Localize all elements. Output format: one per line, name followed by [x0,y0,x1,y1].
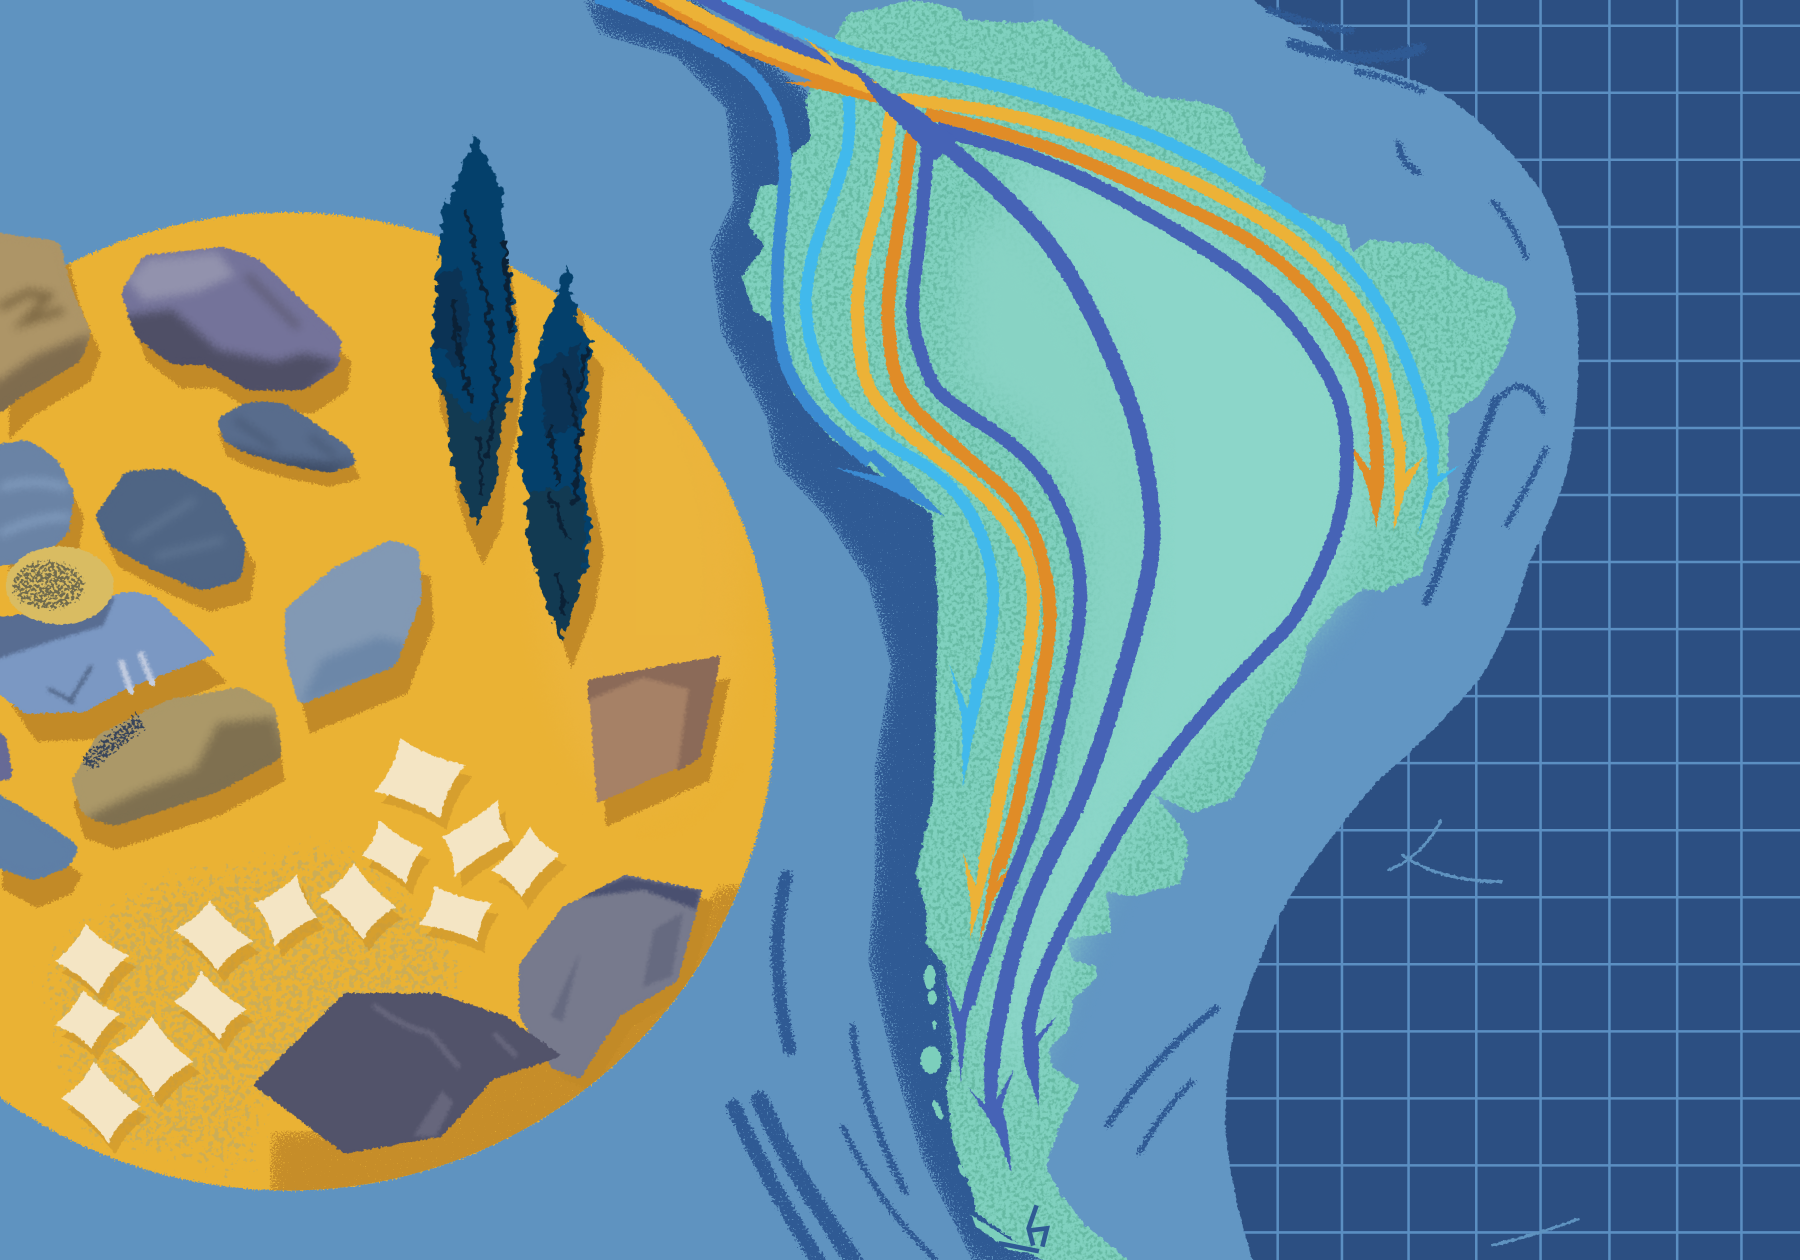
bead faces [48,725,565,1147]
light interior basin [987,149,1372,1102]
artefact: large purple stone [121,247,342,390]
arrowhead: light blue east [1418,442,1460,535]
route junction [855,71,959,161]
land base with mottled texture [742,0,1516,1260]
ocean current shape around the continent [1033,0,1579,1260]
route: yellow eastern branch [898,99,1425,532]
map: South America landmass [742,0,1516,1260]
route: dark blue stem [696,0,937,135]
artefact: grey flake [519,875,703,1079]
arrowhead: orange east [1347,440,1384,528]
bead shadows [55,736,572,1158]
route: orange stem [650,0,882,103]
Tierra del Fuego channels [999,1205,1047,1251]
route: light blue stem and eastern branch [714,0,1460,535]
route: light blue western branch [806,96,993,786]
route: orange western branch [888,121,1050,942]
arrowhead: dark blue west [945,977,976,1083]
light western interior [959,201,1148,792]
artefacts: cream star-shaped beads [48,725,572,1158]
arrowhead: yellow east [1394,442,1425,532]
artefact: striped blue stone [0,440,75,568]
route: yellow western branch [857,103,1034,939]
navy sea fill [1194,0,1800,1260]
arrowhead: light blue west [949,664,985,786]
artefact: flat blue flake [0,591,216,714]
artefact: tan block [0,230,92,430]
artefact: small slate stone [216,402,358,473]
artefact: dark spear point, right [518,264,592,642]
route: dark blue central branch [944,143,1153,1172]
Chilean islands [921,964,1045,1254]
artefact: blue-grey stone [285,540,422,706]
artefact: brown sherd [588,655,721,804]
artefact: blue stone at left edge [0,723,80,880]
arrowhead: orange west [979,855,1017,942]
artefact: yellow lichen pebble [6,546,114,624]
routes: migration arrows [597,0,1460,1172]
sand colour variation [32,337,763,1190]
artefact: olive cobble [71,686,282,827]
route: western coastal blue [597,0,945,517]
sand disc [0,212,776,1190]
arrowhead: dark blue central [968,1062,1014,1172]
route: dark blue eastern branch [937,129,1347,1107]
panel: navy grid sea [1194,0,1800,1260]
route: yellow stem [661,0,882,94]
pale brush strokes on the navy sea [1389,821,1578,1246]
grid lines [1194,0,1800,1260]
arrowhead: dark blue east [1022,1016,1057,1107]
route: orange eastern branch [925,114,1384,528]
artefact: dark spear point, left [433,135,515,526]
arrowhead: yellow west [963,853,992,939]
route: dark blue western branch [913,138,1080,1083]
artefact: dark slate flake [253,993,562,1154]
artefact: dark oval stone [94,468,247,591]
dark coastal shadow along the Pacific coast [580,0,1056,1260]
panel: sand disc with artefacts [0,135,815,1228]
ocean streaks: top right swoosh [1108,9,1546,1153]
ocean streaks: south Pacific brush marks [734,876,936,1260]
artefact shadows [2,174,730,1091]
